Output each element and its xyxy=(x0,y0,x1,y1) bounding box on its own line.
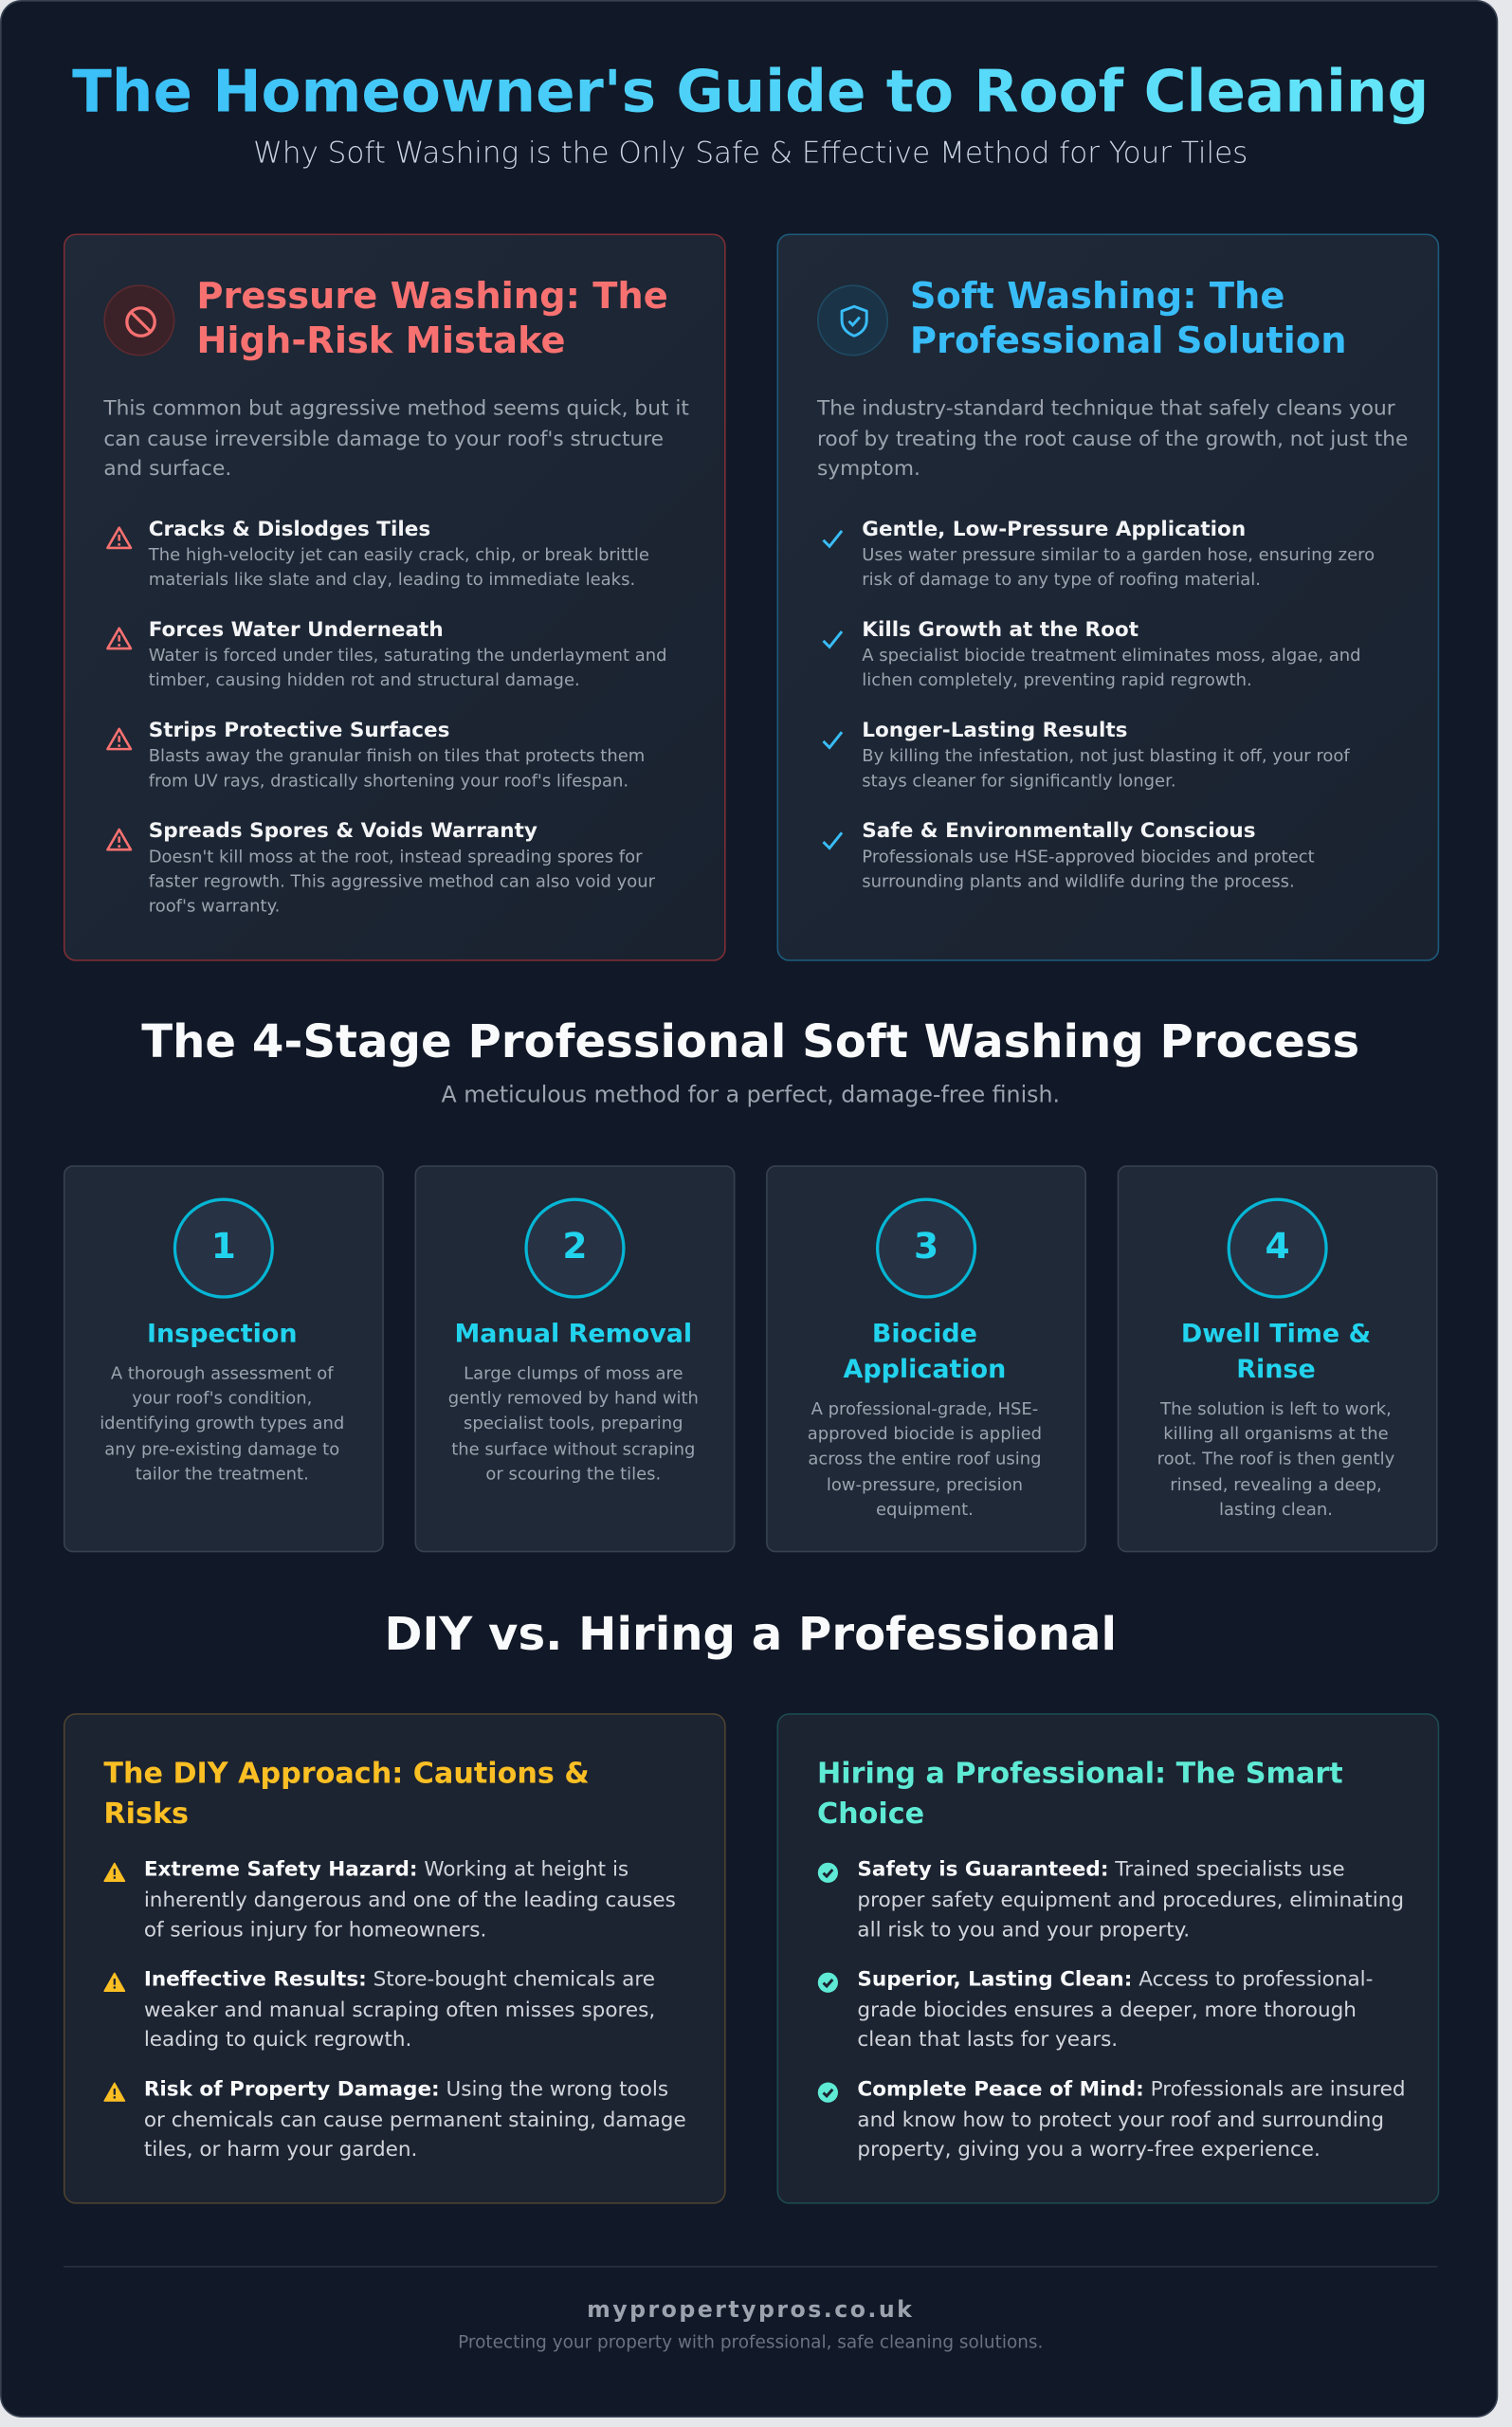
heading: Soft Washing: The xyxy=(910,274,1284,318)
item xyxy=(106,820,655,917)
item xyxy=(823,619,1361,690)
item: Professionals use HSE-approved biocides and protect xyxy=(862,847,1315,867)
panel: pressure washing xyxy=(64,234,726,961)
panel: DIY: or chemicals can cause permanent staining, damage xyxy=(144,2108,686,2132)
item: A specialist biocide treatment eliminates moss, algae, and xyxy=(862,646,1361,666)
intro: roof by treating the root cause of the growth, not just the xyxy=(817,428,1408,451)
stage 4: The solution is left to work, xyxy=(1160,1399,1392,1419)
stage 1: any pre-existing damage to xyxy=(104,1439,339,1459)
panel: DIY: inherently dangerous and one of the leading causes xyxy=(144,1889,676,1912)
item: roof's warranty. xyxy=(149,897,280,917)
item xyxy=(823,720,1350,792)
stage 4: Rinse xyxy=(1236,1354,1316,1383)
panel: DIY: tiles, or harm your garden. xyxy=(144,2139,417,2162)
item: materials like slate and clay, leading to immediate leaks. xyxy=(149,570,635,590)
item xyxy=(106,519,649,590)
panel: DIY: Risk of Property Damage: Using the wrong tools xyxy=(144,2078,668,2102)
section subtitle: A meticulous method for a perfect, damage-free finish. xyxy=(441,1084,1060,1108)
footer tagline: Protecting your property with professional, safe cleaning solutions. xyxy=(458,2332,1043,2352)
item: Strips Protective Surfaces xyxy=(149,720,449,743)
stage 4: root. The roof is then gently xyxy=(1157,1450,1394,1469)
stage 4: Dwell Time & xyxy=(1181,1319,1371,1348)
stage 3: Application xyxy=(844,1354,1006,1383)
item xyxy=(104,2078,686,2162)
subtitle: Why Soft Washing is the Only Safe & Effective Method for Your Tiles xyxy=(253,137,1248,171)
panel: DIY: Ineffective Results: Store-bought chemicals are xyxy=(144,1969,655,1992)
stage 1: tailor the treatment. xyxy=(136,1464,309,1484)
panel: professional: grade biocides ensures a deeper, more thorough xyxy=(857,1998,1357,2022)
intro: This common but aggressive method seems quick, but it xyxy=(103,398,689,421)
item: Gentle, Low-Pressure Application xyxy=(862,519,1246,541)
item xyxy=(823,820,1315,892)
panel: DIY xyxy=(64,1713,726,2204)
item: stays cleaner for significantly longer. xyxy=(862,771,1176,792)
item: By killing the infestation, not just blasting it off, your roof xyxy=(862,746,1350,766)
item xyxy=(106,619,667,690)
stage 1 xyxy=(64,1165,384,1552)
item xyxy=(823,519,1375,590)
stage 2: Large clumps of moss are xyxy=(464,1363,683,1383)
intro: The industry-standard technique that safely cleans your xyxy=(817,398,1395,421)
icon: shield xyxy=(817,284,888,356)
item: Blasts away the granular finish on tiles that protects them xyxy=(149,746,645,766)
item: lichen completely, preventing rapid regrowth. xyxy=(862,670,1252,690)
intro: can cause irreversible damage to your roof's structure xyxy=(103,428,664,451)
stage 2: gently removed by hand with xyxy=(448,1389,699,1409)
panel: professional: proper safety equipment and procedures, eliminating xyxy=(857,1889,1404,1912)
stage 4 xyxy=(1118,1165,1438,1552)
heading: High-Risk Mistake xyxy=(196,319,566,362)
intro: and surface. xyxy=(103,458,231,482)
stage 3: across the entire roof using xyxy=(808,1450,1041,1469)
stage 2: or scouring the tiles. xyxy=(485,1464,661,1484)
panel: professional: Complete Peace of Mind: Professionals are insured xyxy=(857,2078,1406,2102)
stage 3: low-pressure, precision xyxy=(827,1474,1023,1494)
intro xyxy=(817,398,1408,482)
item: The high-velocity jet can easily crack, chip, or break brittle xyxy=(149,545,649,565)
stage 2 xyxy=(415,1165,735,1552)
panel: professional: all risk to you and your property. xyxy=(857,1919,1190,1943)
item: Doesn't kill moss at the root, instead spreading spores for xyxy=(149,847,642,867)
item xyxy=(817,1859,1404,1943)
icon: prohibited xyxy=(103,284,174,356)
heading xyxy=(910,274,1347,362)
title: The Homeowner's Guide to Roof Cleaning xyxy=(72,57,1429,125)
item: from UV rays, drastically shortening your roof's lifespan. xyxy=(149,771,628,792)
panel: professional: Safety is Guaranteed: Trained specialists use xyxy=(857,1859,1345,1882)
item: Uses water pressure similar to a garden hose, ensuring zero xyxy=(862,545,1375,565)
stage 3: approved biocide is applied xyxy=(808,1424,1042,1444)
stage 3: Biocide xyxy=(872,1319,977,1348)
item xyxy=(106,720,645,792)
item: faster regrowth. This aggressive method can also void your xyxy=(149,871,655,892)
panel: DIY: of serious injury for homeowners. xyxy=(144,1919,486,1943)
item: Forces Water Underneath xyxy=(149,619,444,642)
panel: soft washing xyxy=(777,234,1439,961)
item xyxy=(103,1859,676,1943)
stage 4: lasting clean. xyxy=(1219,1500,1333,1520)
item: Safe & Environmentally Conscious xyxy=(862,820,1256,844)
stage 1: Inspection xyxy=(147,1319,298,1348)
panel: DIY: weaker and manual scraping often misses spores, xyxy=(144,1998,655,2022)
heading xyxy=(103,1759,590,1831)
heading: Risks xyxy=(103,1798,189,1831)
panel: DIY: leading to quick regrowth. xyxy=(144,2029,411,2053)
item: risk of damage to any type of roofing material. xyxy=(862,570,1261,590)
item: Cracks & Dislodges Tiles xyxy=(149,519,430,541)
panel: DIY: Extreme Safety Hazard: Working at height is xyxy=(144,1859,628,1882)
heading: The DIY Approach: Cautions & xyxy=(103,1759,590,1791)
stage 2: Manual Removal xyxy=(454,1319,692,1348)
footer domain: mypropertypros.co.uk xyxy=(587,2298,914,2323)
section heading: DIY vs pro: DIY vs. Hiring a Professional xyxy=(385,1608,1117,1661)
stage 2: 2 xyxy=(562,1228,588,1268)
stage 1: 1 xyxy=(211,1228,236,1268)
heading: Professional Solution xyxy=(910,319,1347,362)
stage 4: killing all organisms at the xyxy=(1163,1424,1389,1444)
stage 2: specialist tools, preparing xyxy=(464,1414,683,1433)
heading: Choice xyxy=(817,1798,924,1831)
section heading: process: The 4-Stage Professional Soft Washing Process xyxy=(141,1015,1359,1068)
stage 1: identifying growth types and xyxy=(100,1414,344,1433)
panel: professional: and know how to protect your roof and surrounding xyxy=(857,2108,1384,2132)
panel: professional xyxy=(777,1713,1439,2204)
item: Water is forced under tiles, saturating the underlayment and xyxy=(149,646,667,666)
panel: professional: property, giving you a worry-free experience. xyxy=(857,2139,1321,2162)
heading xyxy=(196,274,668,362)
item: timber, causing hidden rot and structural damage. xyxy=(149,670,580,690)
item xyxy=(817,2078,1406,2162)
panel: professional: Superior, Lasting Clean: Access to professional- xyxy=(857,1969,1373,1992)
stage 3: 3 xyxy=(914,1228,938,1268)
stage 4: 4 xyxy=(1266,1228,1290,1268)
item: surrounding plants and wildlife during the process. xyxy=(862,871,1295,892)
intro xyxy=(103,398,689,482)
item: Longer-Lasting Results xyxy=(862,720,1127,743)
heading: Pressure Washing: The xyxy=(196,274,668,318)
item xyxy=(103,1969,655,2053)
stage 3: equipment. xyxy=(876,1500,974,1520)
stage 3: A professional-grade, HSE- xyxy=(811,1399,1038,1419)
stage 1: A thorough assessment of xyxy=(111,1363,334,1383)
item: Spreads Spores & Voids Warranty xyxy=(149,820,537,844)
heading xyxy=(817,1759,1343,1831)
item: Kills Growth at the Root xyxy=(862,619,1139,642)
stage 4: rinsed, revealing a deep, xyxy=(1170,1474,1382,1494)
heading: Hiring a Professional: The Smart xyxy=(817,1759,1343,1791)
stage 2: the surface without scraping xyxy=(451,1439,695,1459)
panel: professional: clean that lasts for years. xyxy=(857,2029,1118,2053)
intro: symptom. xyxy=(817,458,920,482)
stage 1: your roof's condition, xyxy=(132,1389,312,1409)
item xyxy=(817,1969,1373,2053)
stage 3 xyxy=(766,1165,1086,1552)
